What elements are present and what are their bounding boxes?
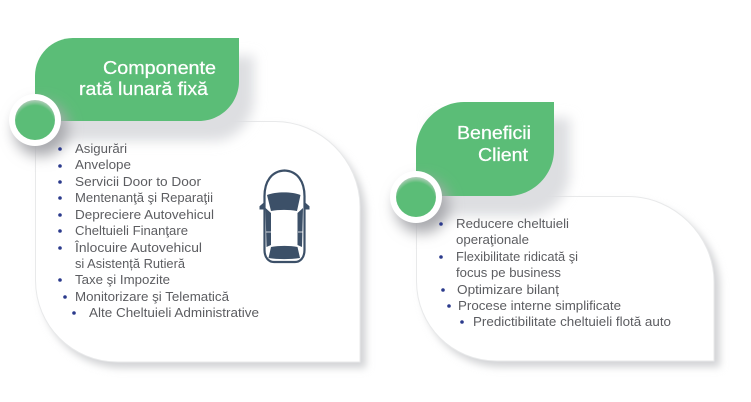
list: componente: Cheltuieli Finanţare <box>75 223 188 238</box>
list: beneficii: Procese interne simplificate <box>458 298 621 313</box>
icon: beneficii circle <box>390 171 449 233</box>
panel: componente card <box>36 122 366 368</box>
list: componente: Depreciere Autovehicul <box>75 207 214 222</box>
list: beneficii <box>439 216 671 329</box>
list: beneficii: focus pe business <box>456 265 561 280</box>
list: componente: Anvelope <box>75 157 131 172</box>
list: componente: Taxe şi Impozite <box>75 272 170 287</box>
heading: client: Client <box>478 145 528 165</box>
list: componente: Asigurări <box>75 141 127 156</box>
heading: componente: Componente <box>103 58 216 78</box>
list: beneficii: Reducere cheltuieli <box>456 216 569 231</box>
icon: componente circle <box>9 94 68 156</box>
list: beneficii: Flexibilitate ridicată şi <box>456 249 578 264</box>
list: beneficii: Predictibilitate cheltuieli flotă auto <box>473 314 671 329</box>
panel: beneficii heading <box>416 102 554 196</box>
list: componente: Mentenanţă şi Reparaţii <box>75 190 213 205</box>
list: componente: Alte Cheltuieli Administrative <box>89 305 259 320</box>
list: componente: Înlocuire Autovehicul <box>74 240 202 255</box>
icon: car <box>260 170 309 262</box>
list: componente: Monitorizare şi Telematică <box>75 289 230 304</box>
panel: componente heading shadow <box>50 56 254 141</box>
list: componente <box>58 141 259 320</box>
panel: beneficii card <box>416 196 720 367</box>
list: componente: Servicii Door to Door <box>75 174 202 189</box>
list: beneficii: operaţionale <box>456 232 529 247</box>
list: beneficii: Optimizare bilanț <box>457 282 559 297</box>
panel: componente heading <box>35 38 239 121</box>
list: componente: si Asistență Rutieră <box>75 256 186 271</box>
panel: beneficii heading shadow <box>431 118 570 216</box>
heading: rată lunară fixă: rată lunară fixă <box>79 79 209 99</box>
heading: beneficii: Beneficii <box>457 123 531 143</box>
